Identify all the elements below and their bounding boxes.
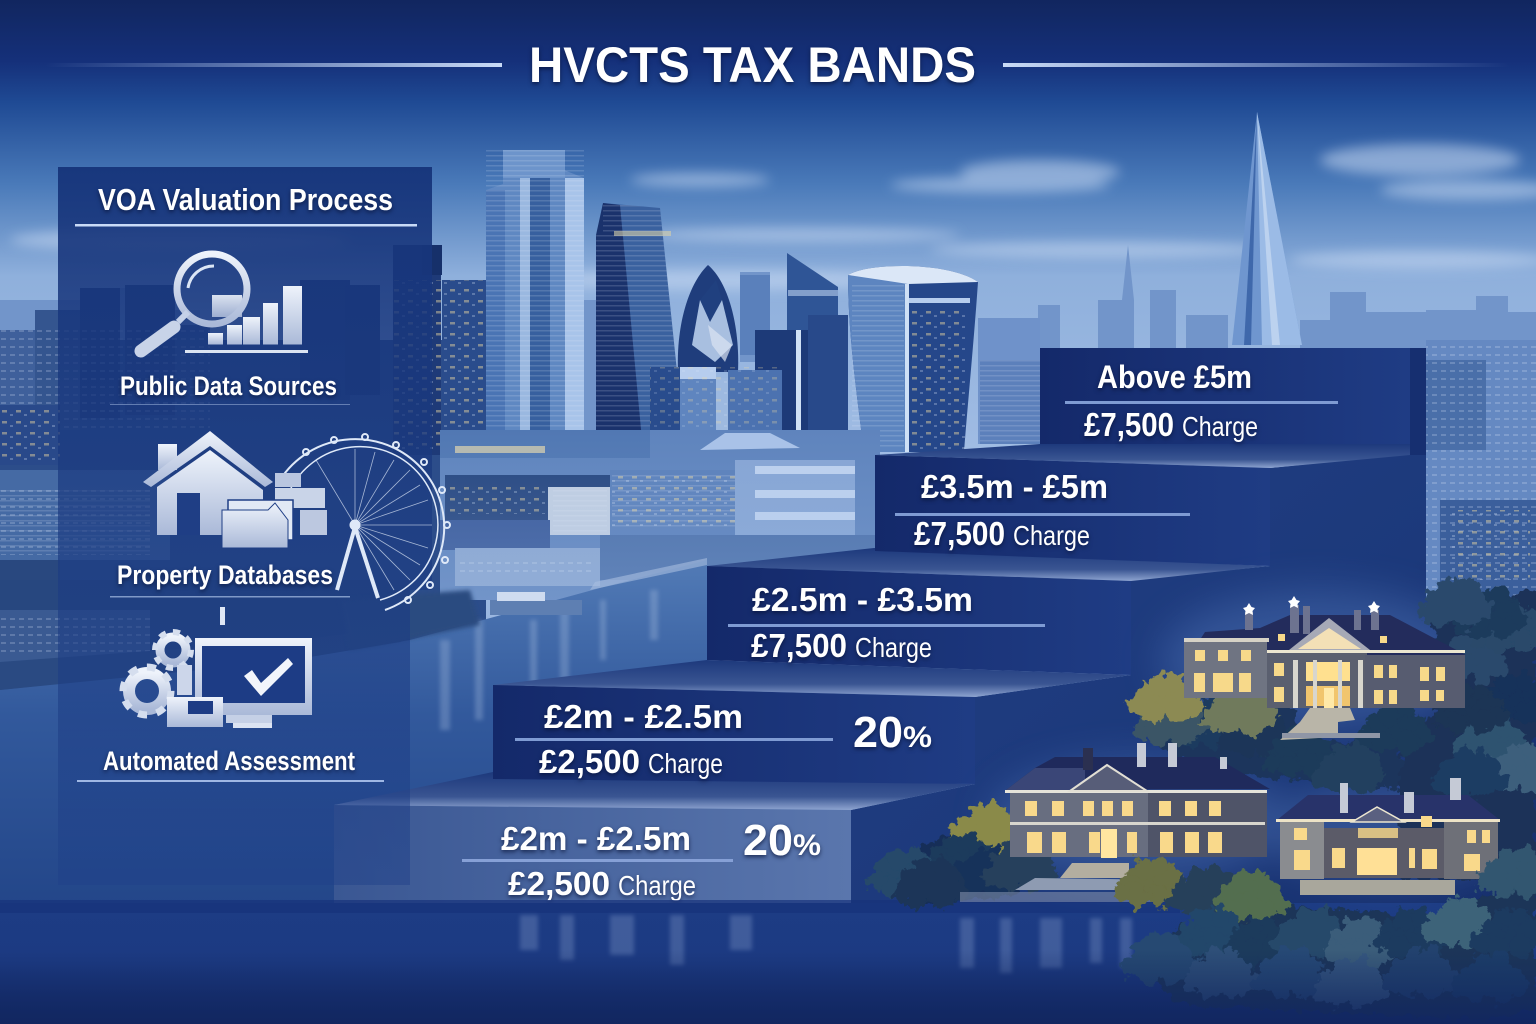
tower: cheesegrater	[596, 203, 680, 440]
step 2: £2m - £2.5m: Charge	[648, 748, 723, 779]
step 5: above £5m	[875, 348, 1426, 468]
icon: magnifier and bar chart	[141, 254, 308, 353]
step 2: £2m - £2.5m: %	[903, 721, 932, 754]
icon: london eye wheel	[280, 434, 450, 610]
step 2: £2m - £2.5m: 20	[853, 708, 903, 757]
tower: scalpel	[740, 253, 838, 355]
label: property databases	[110, 560, 350, 625]
step 4: £3.5m - £5m: £7,500	[914, 515, 1005, 552]
step 1: £2m - £2.5m: £2m - £2.5m	[501, 820, 691, 857]
icon: gears and monitor with check	[123, 632, 312, 728]
step 1: £2m - £2.5m: %	[793, 829, 821, 862]
left city block	[0, 245, 486, 690]
river foreground	[0, 900, 1536, 1024]
step 1: £2m - £2.5m: Charge	[618, 870, 696, 901]
skyline: city of london towers	[486, 150, 1040, 452]
step 3: £2.5m - £3.5m: £2.5m - £3.5m	[752, 581, 973, 618]
step 3: £2.5m - £3.5m: £7,500	[751, 627, 847, 664]
step 3: £2.5m - £3.5m: Charge	[855, 632, 932, 663]
hedges behind mansions	[867, 577, 1536, 909]
panel background	[58, 167, 432, 885]
tower: 22 bishopsgate	[486, 150, 584, 440]
title	[45, 37, 1510, 93]
mansion: left lower	[960, 743, 1270, 902]
step 1: £2m - £2.5m: 20	[743, 816, 793, 865]
mansion: upper	[1184, 596, 1466, 740]
foreground trees	[1112, 847, 1536, 1020]
river	[0, 558, 707, 905]
mansion: right lower	[1276, 778, 1500, 895]
step 3: £2.5m - £3.5m	[493, 566, 1131, 697]
title: HVCTS TAX BANDS	[529, 37, 976, 93]
step 5: above £5m: Charge	[1182, 411, 1258, 442]
tower: gherkin	[678, 265, 738, 372]
label: public data sources: Public Data Sources	[120, 371, 337, 401]
low central buildings	[440, 430, 880, 600]
stars on chimneys	[1243, 596, 1380, 615]
far skyline	[0, 245, 1536, 440]
step 5: above £5m: Above £5m	[1097, 359, 1252, 395]
label: automated assessment: Automated Assessment	[103, 746, 355, 776]
skyline: the shard	[1232, 112, 1302, 345]
label: property databases: Property Databases	[117, 560, 333, 590]
panel heading: VOA Valuation Process	[98, 182, 393, 217]
step 2: £2m - £2.5m: £2,500	[539, 743, 640, 780]
step 4: £3.5m - £5m: £3.5m - £5m	[921, 468, 1108, 505]
mansion glow	[990, 590, 1510, 880]
step 1: £2m - £2.5m: £2,500	[508, 865, 610, 902]
dark right mass behind stairs	[851, 340, 1536, 1024]
mid towers	[650, 315, 848, 442]
icon: house and folders	[143, 431, 327, 548]
clouds	[10, 144, 1536, 290]
step 2: £2m - £2.5m	[334, 685, 975, 810]
step 4: £3.5m - £5m	[707, 455, 1270, 581]
step 2: £2m - £2.5m: £2m - £2.5m	[544, 698, 743, 735]
step 1: £2m - £2.5m	[334, 805, 851, 903]
river bank with boat	[0, 558, 707, 690]
step 5: above £5m: £7,500	[1084, 406, 1174, 443]
panel: VOA valuation process	[58, 167, 450, 885]
staircase of tax bands	[334, 348, 1426, 903]
tower: walkie talkie	[848, 266, 978, 452]
step 4: £3.5m - £5m: Charge	[1013, 520, 1090, 551]
